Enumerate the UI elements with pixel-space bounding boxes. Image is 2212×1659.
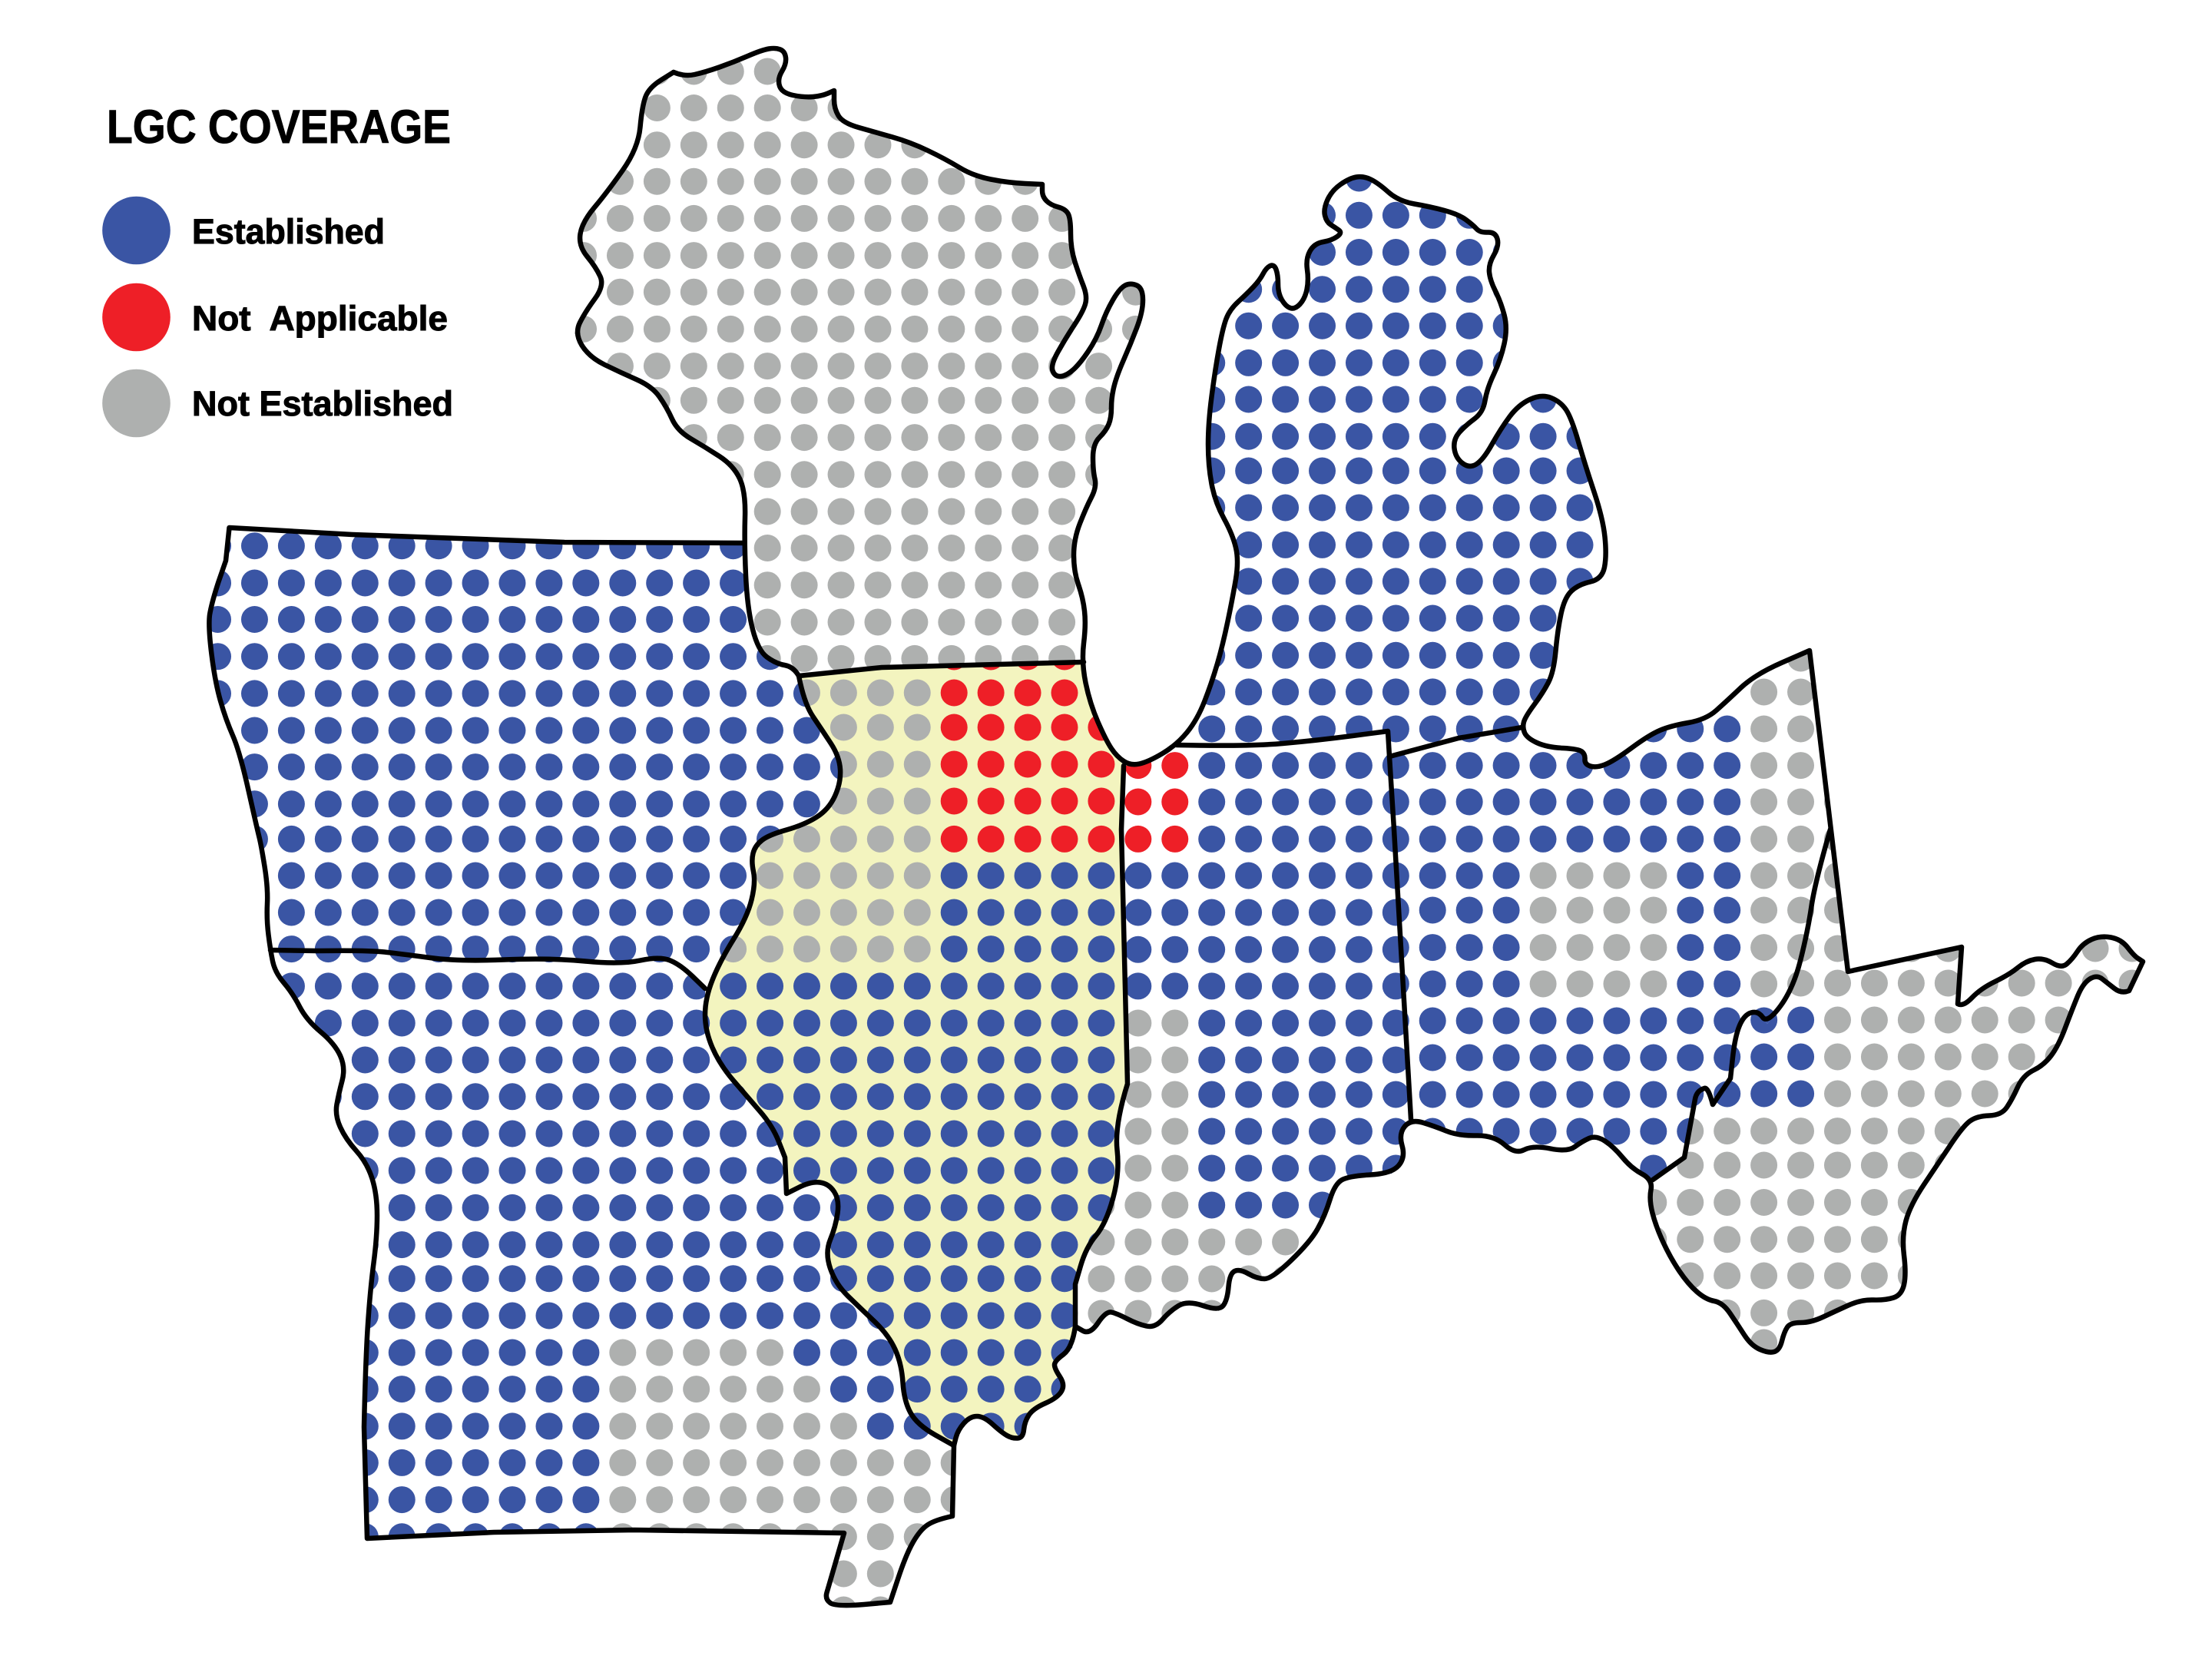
border: Illinois north (799, 662, 1084, 676)
border: Illinois west (705, 676, 954, 1445)
dots: Indiana (1065, 766, 1398, 1313)
dots: Wisconsin (547, 71, 1175, 658)
legend item: not applicable: Not Applicable (192, 299, 448, 338)
dots: Ohio (1396, 658, 1843, 1168)
legend item: established: Established (192, 212, 385, 251)
legend (102, 101, 453, 437)
legend item: not applicable (102, 283, 448, 351)
legend title: LGC COVERAGE (107, 101, 451, 153)
border: Illinois and Indiana (1075, 766, 1128, 1326)
border: Indiana north and east (1177, 731, 1411, 1119)
outer coast: Wisconsin, Lake Michigan, Michigan, Ohio, Pennsylvania line, east boundary, Ohio River, Indiana south (674, 48, 2143, 1353)
dots: Iowa (181, 546, 922, 949)
outer boundary: Illinois south, Missouri south and west, Iowa west and north (209, 528, 1075, 1605)
border: Wisconsin west and Iowa east (578, 72, 799, 676)
dots: Missouri (278, 952, 952, 1603)
border: Iowa and Missouri (270, 950, 705, 988)
dots: Illinois (697, 657, 1137, 1426)
border: Ohio River (1653, 830, 1830, 1180)
dots: Michigan (1175, 178, 1621, 729)
border: Michigan and Ohio (1389, 727, 1522, 757)
dots: West Virginia and Kentucky (1654, 839, 2151, 1343)
legend item: not established: Not Established (192, 384, 453, 423)
legend item: established (102, 197, 385, 264)
legend item: not established (102, 369, 453, 437)
Illinois highlighted fill (705, 662, 1128, 1445)
